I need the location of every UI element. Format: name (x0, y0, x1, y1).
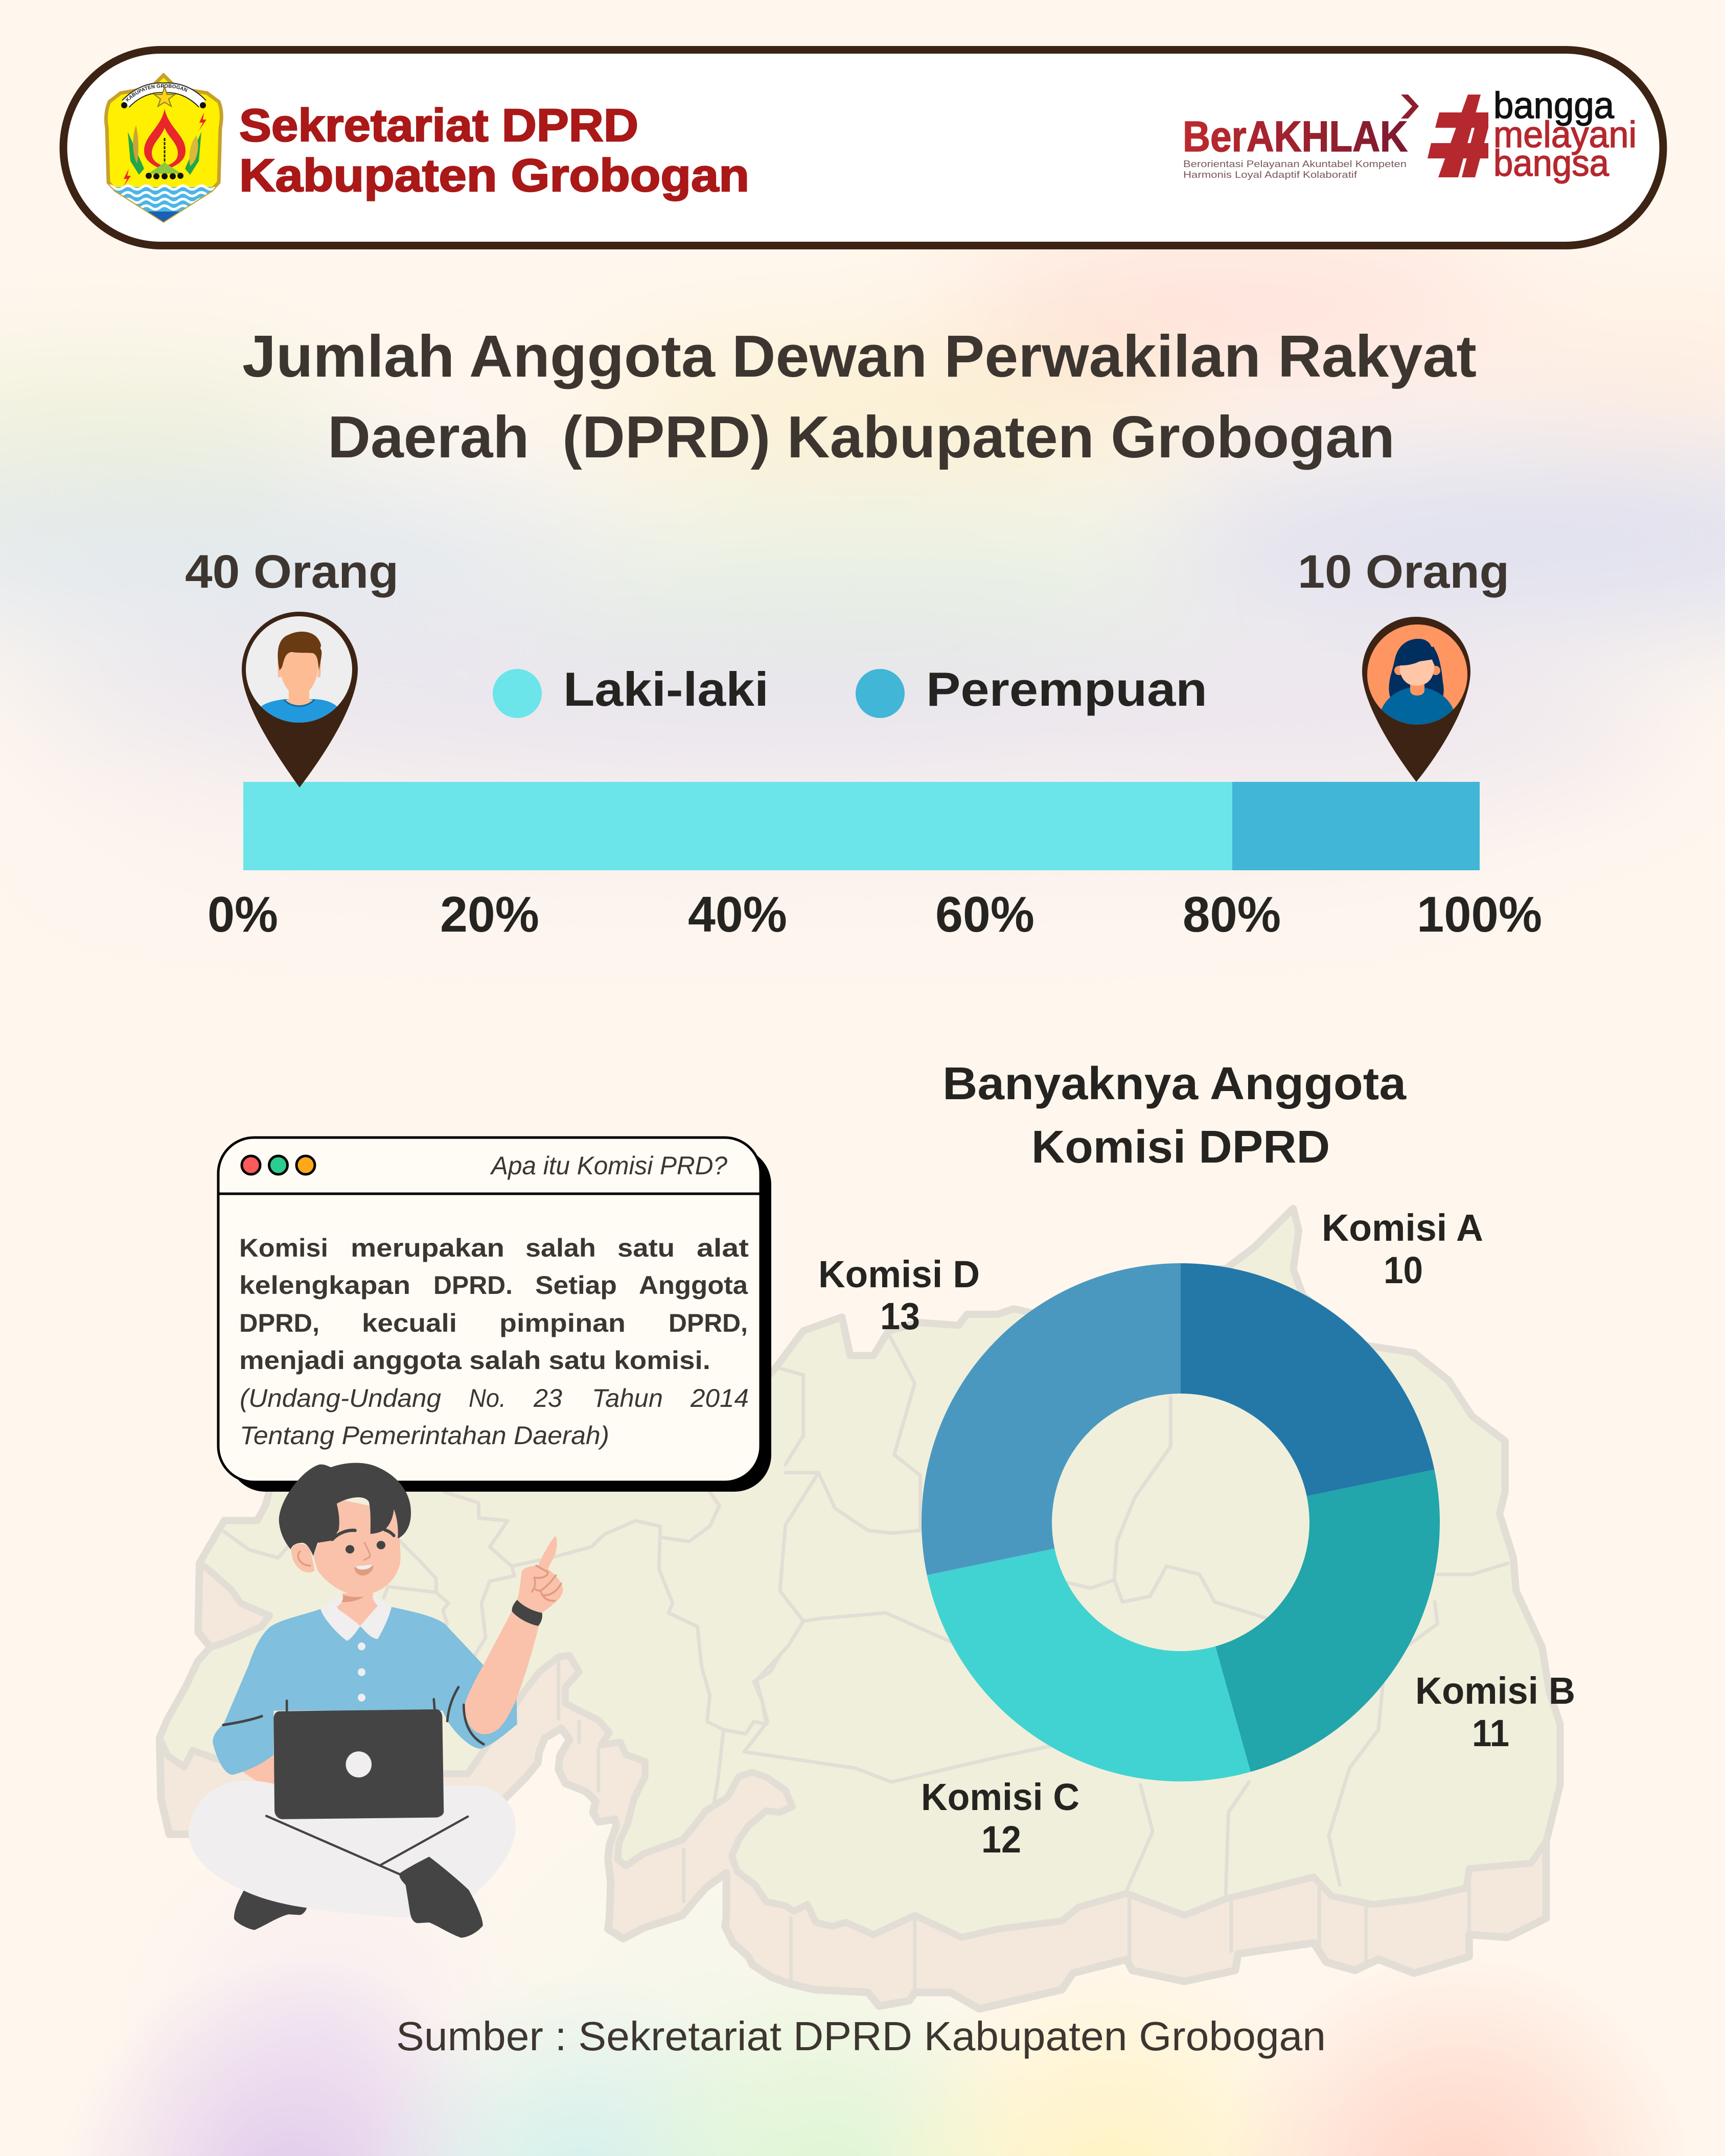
logo: bangga melayani bangsa: bangsa (1493, 143, 1609, 184)
heading: institution name: Sekretariat DPRD (239, 100, 638, 151)
panel body text: merupakan (351, 1234, 504, 1262)
label: Komisi C (921, 1776, 1079, 1861)
label: Komisi B: 11 (1472, 1712, 1509, 1754)
icon: male pin (242, 612, 358, 787)
map of Grobogan in the background (159, 1209, 1560, 2009)
icon: Grobogan regency crest (104, 73, 223, 223)
logo: BerAKHLAK: Harmonis Loyal Adaptif Kolaboratif (1183, 170, 1358, 180)
axis labels: 100% (1417, 886, 1542, 942)
heading: commission chart: Banyaknya Anggota (942, 1058, 1407, 1109)
label: Komisi A: Komisi A (1322, 1207, 1483, 1249)
logo: bangga melayani bangsa: melayani (1493, 114, 1637, 155)
panel heading: Apa itu Komisi PRD? (490, 1151, 727, 1180)
legend: Perempuan (926, 662, 1207, 716)
panel body text: 23 (533, 1384, 562, 1412)
label: Komisi B (1415, 1670, 1575, 1754)
label: Komisi C: Komisi C (921, 1776, 1079, 1818)
heading: commission chart: Komisi DPRD (1031, 1122, 1330, 1173)
label: Komisi D: 13 (880, 1295, 920, 1337)
panel body text: DPRD, (239, 1309, 319, 1337)
label: Komisi D: Komisi D (818, 1253, 980, 1295)
logo: BerAKHLAK: Berorientasi Pelayanan Akuntabel Kompeten (1183, 159, 1407, 169)
heading: institution name: Kabupaten Grobogan (239, 150, 749, 201)
logo: BerAKHLAK: BerAKHLAK (1183, 112, 1408, 160)
panel body text (239, 1234, 749, 1450)
logo: BerAKHLAK (1183, 95, 1419, 180)
callout: female count: 10 Orang (1298, 546, 1509, 598)
legend: Laki-laki (563, 662, 769, 716)
logo: bangga melayani bangsa (1428, 85, 1637, 184)
title (242, 323, 1477, 470)
panel body text: Tentang Pemerintahan Daerah) (240, 1421, 609, 1450)
callout: male count: 40 Orang (185, 546, 399, 598)
axis labels: 20% (440, 886, 539, 942)
panel body text: kelengkapan (239, 1271, 410, 1300)
logo: bangga melayani bangsa: bangga (1493, 85, 1615, 126)
panel body text: (Undang-Undang (240, 1384, 441, 1412)
panel body text: Komisi (239, 1234, 328, 1262)
label: Komisi B: Komisi B (1415, 1670, 1575, 1712)
title: Jumlah Anggota Dewan Perwakilan Rakyat (242, 323, 1477, 389)
panel body text: menjadi anggota salah satu komisi. (239, 1346, 710, 1375)
panel body text: kecuali (362, 1309, 457, 1337)
axis labels: 40% (688, 886, 787, 942)
label: Komisi A: 10 (1384, 1249, 1423, 1291)
label: Komisi D (818, 1253, 980, 1337)
label: Komisi A (1322, 1207, 1483, 1291)
header banner (59, 46, 1667, 249)
panel body text: Setiap (535, 1271, 617, 1300)
stacked bar chart: gender share (208, 782, 1542, 942)
panel body text: Anggota (639, 1271, 748, 1300)
legend (493, 662, 1207, 718)
panel body text: satu (617, 1234, 675, 1262)
panel body text: DPRD. (433, 1271, 513, 1300)
donut chart: commission members (922, 1263, 1440, 1781)
axis labels: 0% (208, 886, 278, 942)
panel body text: No. (469, 1384, 506, 1412)
label: Komisi C: 12 (981, 1818, 1021, 1861)
illustration: man with laptop pointing up (189, 1463, 563, 1938)
icon: Grobogan regency crest: KABUPATEN GROBOGAN (126, 84, 188, 102)
heading: institution name (239, 100, 749, 201)
panel body text: Tahun (592, 1384, 663, 1412)
panel body text: DPRD, (669, 1309, 748, 1337)
axis labels (208, 886, 1542, 942)
panel body text: 2014 (690, 1384, 749, 1412)
icon: female pin (1362, 617, 1470, 782)
window control dots (242, 1156, 315, 1174)
heading: commission chart (942, 1058, 1407, 1173)
panel body text: salah (525, 1234, 596, 1262)
axis labels: 60% (935, 886, 1034, 942)
panel: what is Komisi (218, 1138, 771, 1492)
panel body text: alat (697, 1234, 749, 1262)
panel body text: pimpinan (499, 1309, 626, 1337)
title: Daerah (DPRD) Kabupaten Grobogan (328, 404, 1395, 470)
source note: Sumber : Sekretariat DPRD Kabupaten Grobogan (396, 2013, 1326, 2059)
axis labels: 80% (1183, 886, 1281, 942)
